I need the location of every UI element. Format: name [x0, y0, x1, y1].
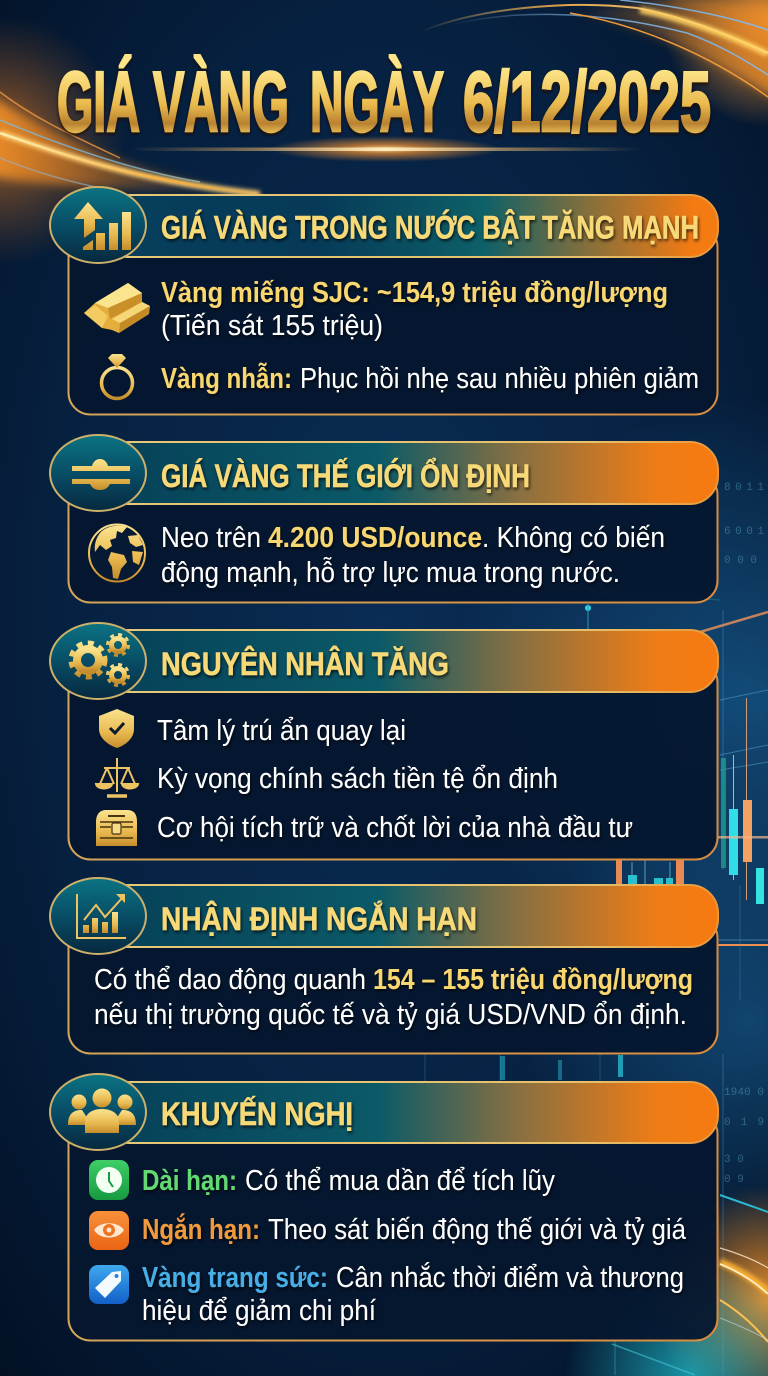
- panel body: [68, 1112, 718, 1340]
- heading: GIÁ VÀNG THẾ GIỚI ỔN ĐỊNH: [161, 458, 530, 494]
- text: neo trên: 4.200 USD/ounce: [268, 522, 482, 554]
- text: dài hạn: Dài hạn:: [142, 1165, 237, 1197]
- icon: clock: [89, 1160, 129, 1200]
- background: 0 0 0: [724, 555, 757, 567]
- text: neo trên: Neo trên: [161, 522, 261, 554]
- chart decoration: [700, 612, 768, 632]
- text: vàng nhẫn: Vàng nhẫn:: [161, 361, 292, 395]
- text: neo trên: động mạnh, hỗ trợ lực mua trong nước.: [161, 556, 620, 589]
- text: kỳ vọng: Kỳ vọng chính sách tiền tệ ổn định: [157, 763, 558, 795]
- panel body: [68, 661, 718, 860]
- icon: treasure chest: [96, 810, 137, 846]
- icon: eye: [89, 1211, 129, 1250]
- text: trú ẩn: Tâm lý trú ẩn quay lại: [157, 715, 406, 747]
- icon: ring: [102, 354, 132, 398]
- icon: gold bars: [84, 283, 150, 333]
- text: vàng trang sức: Vàng trang sức:: [142, 1262, 328, 1294]
- heading: NGUYÊN NHÂN TĂNG: [161, 646, 449, 682]
- text: cơ hội: Cơ hội tích trữ và chốt lời của nhà đầu tư: [157, 812, 633, 844]
- text: vàng nhẫn: Phục hồi nhẹ sau nhiều phiên giảm: [300, 363, 699, 395]
- background: 6 0 0 1: [724, 526, 764, 538]
- icon: globe: [89, 524, 145, 582]
- text: dài hạn: Có thể mua dần để tích lũy: [245, 1165, 555, 1197]
- text: dao động: 154 – 155 triệu đồng/lượng: [373, 964, 693, 996]
- background: 0 1 9: [724, 1117, 764, 1129]
- background: 1940 0: [724, 1087, 764, 1099]
- text: vàng trang sức: hiệu để giảm chi phí: [142, 1295, 376, 1327]
- text: dao động: Có thể dao động quanh: [94, 964, 366, 996]
- title: VÀNG: [153, 55, 289, 150]
- text: ngắn hạn: [142, 1212, 687, 1246]
- heading: NHẬN ĐỊNH NGẮN HẠN: [161, 901, 477, 937]
- header bar: [100, 630, 718, 692]
- icon: shield: [99, 709, 134, 748]
- title: NGÀY: [310, 55, 444, 150]
- background: 0 9: [724, 1174, 744, 1186]
- text: vàng trang sức: Cân nhắc thời điểm và thương: [336, 1261, 684, 1294]
- header bar: [100, 195, 718, 257]
- header icon: rising bars: [50, 187, 146, 263]
- panel: giá vàng trong nước: [50, 187, 718, 414]
- background: 3 0: [724, 1154, 744, 1166]
- panel body: [68, 916, 718, 1054]
- header bar: [100, 442, 718, 504]
- text: vàng nhẫn: [161, 361, 699, 395]
- panel body: [68, 225, 718, 414]
- text: vàng trang sức: [142, 1261, 684, 1327]
- swooshes: [0, 95, 240, 190]
- header icon: people: [50, 1074, 146, 1150]
- header icon: gears: [50, 623, 146, 699]
- title: GIÁ: [57, 55, 140, 150]
- header bar: [100, 885, 718, 947]
- text: tiến sát: (Tiến sát 155 triệu): [161, 310, 383, 342]
- panel: nguyên nhân tăng: [50, 623, 718, 860]
- icon: scales: [96, 758, 138, 796]
- text: vàng miếng: Vàng miếng SJC: ~154,9 triệu đồng/lượng: [161, 277, 668, 309]
- heading: KHUYẾN NGHỊ: [161, 1096, 353, 1132]
- title glow: [270, 136, 500, 162]
- header icon: chart: [50, 878, 146, 954]
- panel: nhận định ngắn hạn: [50, 878, 718, 1054]
- text: dài hạn: [142, 1165, 555, 1197]
- text: dao động: nếu thị trường quốc tế và tỷ giá USD/VND ổn định.: [94, 999, 687, 1031]
- panel: khuyến nghị: [50, 1074, 718, 1340]
- icon: price tag: [89, 1265, 129, 1304]
- text: ngắn hạn: Theo sát biến động thế giới và tỷ giá: [268, 1214, 687, 1246]
- text: dao động: [94, 964, 693, 1031]
- title: [57, 55, 711, 150]
- panel: giá vàng thế giới: [50, 435, 718, 602]
- header bar: [100, 1082, 718, 1143]
- text: ngắn hạn: Ngắn hạn:: [142, 1212, 260, 1246]
- header icon: balance lines: [50, 435, 146, 511]
- background: 8 0 1 1: [724, 482, 764, 494]
- panel body: [68, 473, 718, 602]
- text: neo trên: [161, 522, 665, 589]
- text: neo trên: . Không có biến: [482, 522, 665, 554]
